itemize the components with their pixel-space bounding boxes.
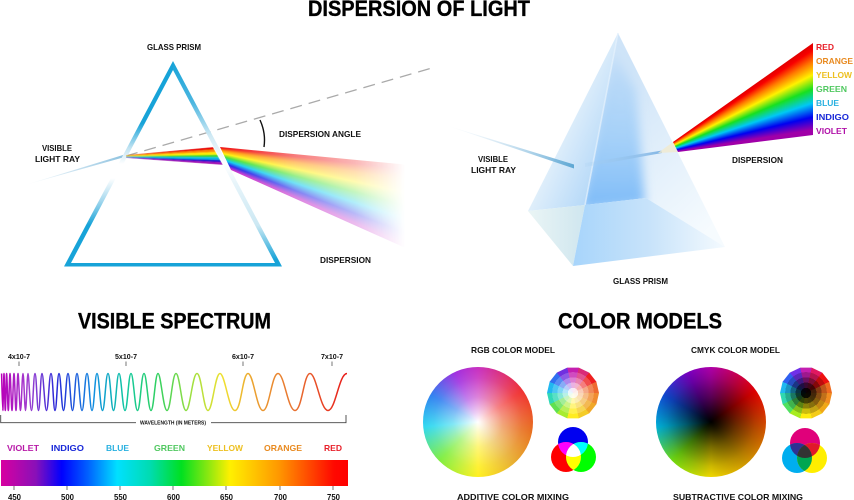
panel: visible spectrum <box>0 308 348 500</box>
spectrum colour names: ORANGE <box>264 443 302 453</box>
wavelength bracket <box>1 415 346 423</box>
panel: color models <box>423 308 832 500</box>
wavelength scale labels <box>8 352 343 366</box>
label: glass prism: GLASS PRISM <box>147 42 201 52</box>
subtractive mixing venn <box>782 428 827 473</box>
label: visible light ray: LIGHT RAY <box>35 154 80 164</box>
spectrum colour names: GREEN <box>154 443 185 453</box>
label: dispersion: DISPERSION <box>320 255 371 265</box>
spectrum colour names: RED <box>324 443 342 453</box>
label: visible light ray <box>35 143 80 164</box>
spectrum colour labels: YELLOW <box>816 70 853 80</box>
heading: VISIBLE SPECTRUM <box>78 308 271 334</box>
light ray entering pyramid <box>445 125 574 168</box>
wave chart <box>2 374 347 410</box>
label: CMYK color model: CMYK COLOR MODEL <box>691 345 780 355</box>
dispersion angle arc <box>260 120 264 147</box>
rainbow beam <box>673 43 813 152</box>
label: RGB color model: RGB COLOR MODEL <box>471 345 555 355</box>
nanometre scale <box>8 486 340 500</box>
spectrum colour names: INDIGO <box>51 443 84 453</box>
wavelength scale labels: 5x10-7 <box>115 352 137 361</box>
CMYK colour wheel <box>656 367 766 477</box>
spectrum colour labels: ORANGE <box>816 56 853 66</box>
spectrum colour labels: INDIGO <box>816 112 849 122</box>
label: dispersion angle: DISPERSION ANGLE <box>279 129 361 139</box>
spectrum colour names: YELLOW <box>207 443 244 453</box>
triangle prism outline <box>64 61 282 266</box>
label: visible light ray: VISIBLE <box>42 143 72 153</box>
spectrum colour names: VIOLET <box>7 443 40 453</box>
panel: triangular prism diagram <box>35 42 430 266</box>
RGB segmented wheel <box>547 367 599 419</box>
spectrum colour labels: BLUE <box>816 98 839 108</box>
heading: COLOR MODELS <box>558 308 722 334</box>
additive mixing venn <box>551 427 596 472</box>
glass pyramid <box>528 33 725 266</box>
label: wavelength in meters: WAVELENGTH (IN METERS) <box>140 420 206 426</box>
wavelength scale labels: 4x10-7 <box>8 352 30 361</box>
icon: dashed reference line <box>126 68 432 156</box>
panel: 3D pyramid prism diagram <box>464 33 853 286</box>
spectrum gradient bar <box>1 460 348 486</box>
label: visible light ray: VISIBLE <box>478 154 508 164</box>
label: dispersion: DISPERSION <box>732 155 783 165</box>
spectrum colour labels: RED <box>816 42 834 52</box>
wavelength scale labels: 7x10-7 <box>321 352 343 361</box>
spectrum colour labels <box>816 42 853 136</box>
label: visible light ray <box>471 154 516 175</box>
label: visible light ray: LIGHT RAY <box>471 165 516 175</box>
faint rainbow origin <box>658 142 678 153</box>
spectrum colour names <box>7 443 342 453</box>
light ray inside pyramid <box>585 150 662 167</box>
spectrum colour labels: VIOLET <box>816 126 848 136</box>
dispersed rainbow beam <box>220 147 400 244</box>
spectrum colour labels: GREEN <box>816 84 847 94</box>
label: glass prism: GLASS PRISM <box>613 276 668 286</box>
CMYK segmented wheel <box>780 367 832 419</box>
light ray entering <box>25 155 123 185</box>
RGB colour wheel <box>423 367 533 477</box>
spectrum colour names: BLUE <box>106 443 129 453</box>
rainbow inside prism <box>126 147 223 165</box>
wavelength scale labels: 6x10-7 <box>232 352 254 361</box>
